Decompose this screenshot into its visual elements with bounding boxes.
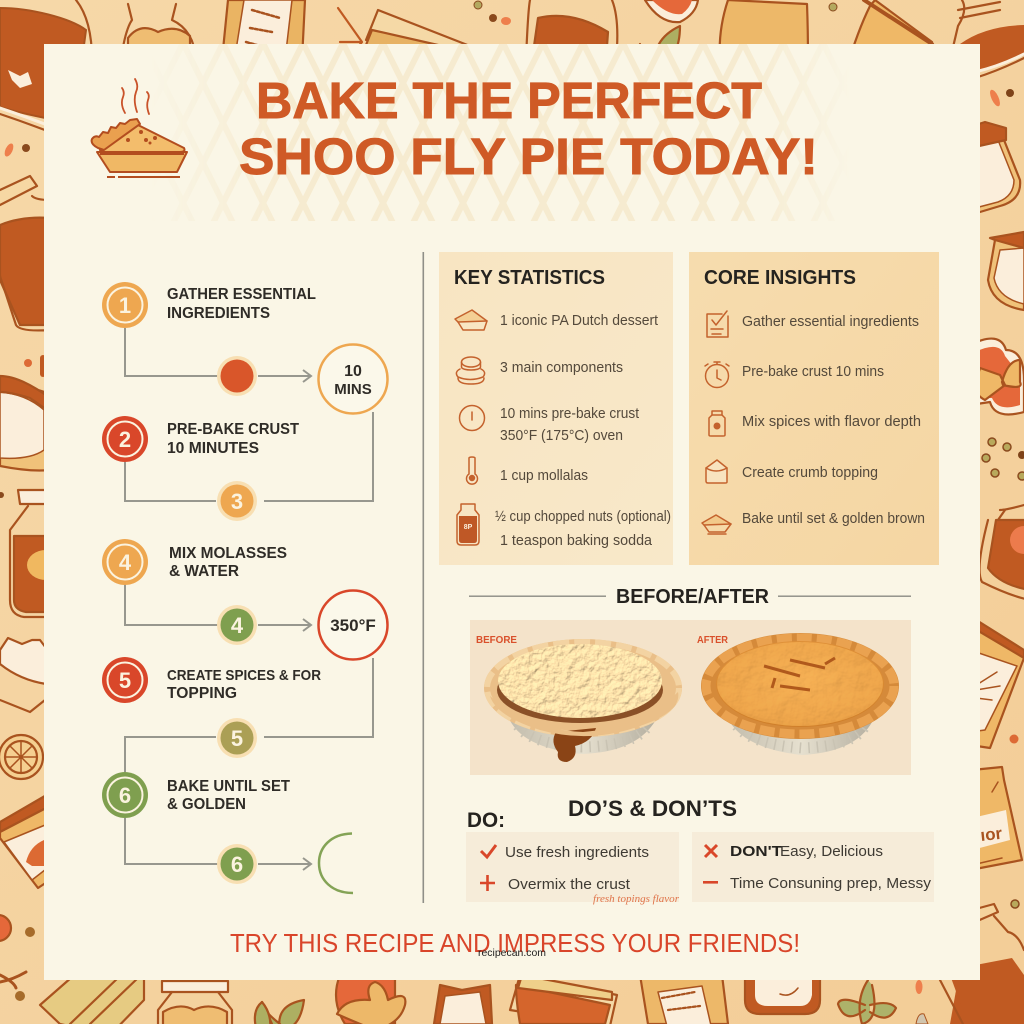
node 4 — [217, 605, 257, 645]
right column doodles — [950, 25, 1024, 1024]
step 5 badge — [102, 657, 148, 703]
step 6 label — [167, 778, 290, 813]
step 2 label: PRE-BAKE CRUST — [167, 421, 299, 438]
do item: Overmix the crust — [508, 876, 631, 893]
before pie: raw crumb topping — [484, 639, 682, 762]
stat text: pre-bake: 10 mins pre-bake crust — [500, 406, 639, 422]
step 2 label: 10 MINUTES — [167, 440, 259, 457]
callout: 350F: 350°F — [330, 616, 376, 635]
icon: molasses jar: 8P — [464, 524, 473, 531]
icon: clock — [460, 406, 484, 430]
step 6 badge — [102, 772, 148, 818]
step 2 badge — [102, 416, 148, 462]
panel: key statistics — [439, 252, 673, 565]
node 6 — [217, 844, 257, 884]
step 4 label: MIX MOLASSES — [169, 545, 287, 562]
insight text: bake: Bake until set & golden brown — [742, 511, 925, 527]
callout: 10 mins: MINS — [334, 381, 372, 398]
call to action: TRY THIS RECIPE AND IMPRESS YOUR FRIENDS! — [230, 928, 800, 958]
insight text: pre-bake: Pre-bake crust 10 mins — [742, 364, 884, 380]
flour bag label text: ıor — [979, 824, 1003, 845]
icon: cross — [705, 845, 717, 857]
heading: core insights: CORE INSIGHTS — [704, 267, 856, 289]
stat text: nuts and soda — [495, 509, 671, 549]
icon: molasses jar — [457, 504, 479, 545]
heading: key statistics: KEY STATISTICS — [454, 267, 605, 289]
stat text: nuts and soda: ½ cup chopped nuts (optional) — [495, 509, 671, 525]
stat text: nuts and soda: 1 teaspon baking sodda — [500, 533, 653, 549]
after label: AFTER — [697, 634, 728, 646]
icon: spice jar — [709, 411, 725, 436]
heading: before and after: BEFORE/AFTER — [616, 586, 770, 608]
stat text: molasses: 1 cup mollalas — [500, 468, 588, 484]
callout: 10 mins — [318, 344, 388, 414]
icon: check — [481, 845, 496, 857]
stat text: dessert: 1 iconic PA Dutch dessert — [500, 313, 658, 329]
step 2 badge: 2 — [119, 427, 131, 452]
insight text: ingredients: Gather essential ingredients — [742, 314, 919, 330]
don't item: Easy, Delicious — [780, 843, 883, 860]
photo comparison panel — [470, 620, 911, 775]
icon: steaming pie slice — [92, 79, 187, 177]
icon: plus — [480, 875, 495, 891]
top left rust jar — [0, 8, 86, 119]
do item: Use fresh ingredients — [505, 844, 649, 861]
top row doodles — [76, 0, 1000, 122]
bottom row doodles — [40, 970, 1024, 1024]
step 6 label: & GOLDEN — [167, 796, 246, 813]
node 3 — [217, 481, 257, 521]
panel: don't list — [692, 832, 934, 902]
node 5: 5 — [231, 726, 243, 751]
step 5 label: TOPPING — [167, 685, 237, 702]
step 1 badge: 1 — [119, 293, 131, 318]
node 6: 6 — [231, 852, 243, 877]
node: red dot — [217, 356, 257, 396]
script note: fresh topings flavor — [593, 894, 679, 905]
don't item: Time Consuning prep, Messy — [730, 875, 932, 892]
step 4 badge — [102, 539, 148, 585]
panel: do list — [466, 832, 679, 905]
step 2 label — [167, 421, 299, 457]
flowchart: six baking steps — [102, 282, 388, 893]
step 6 label: BAKE UNTIL SET — [167, 778, 290, 795]
icon: stopwatch — [705, 362, 729, 388]
left column doodles — [0, 70, 65, 988]
don't item — [730, 843, 883, 860]
watermark: recipecan.com — [478, 947, 546, 959]
step 1 label — [167, 286, 316, 322]
panel: core insights — [689, 252, 939, 565]
icon: baked pie — [702, 515, 731, 534]
don't item: DON'T — [730, 843, 782, 860]
heading: do's and don'ts: DO’S & DON’TS — [568, 796, 737, 821]
step 4 badge: 4 — [119, 550, 132, 575]
icon: pie — [455, 310, 487, 330]
title — [239, 72, 818, 185]
icon: checklist — [707, 311, 728, 337]
lattice header band — [200, 44, 812, 221]
open arc — [319, 834, 353, 893]
title: SHOO FLY PIE TODAY! — [239, 128, 818, 185]
step 5 label — [167, 667, 321, 702]
title: BAKE THE PERFECT — [256, 72, 762, 129]
icon: layers — [456, 357, 485, 384]
node 5 — [217, 718, 257, 758]
icon: thermometer — [466, 457, 478, 484]
stat text: components: 3 main components — [500, 360, 623, 376]
stat text: pre-bake: 350°F (175°C) oven — [500, 428, 623, 444]
step 1 label: GATHER ESSENTIAL — [167, 286, 316, 303]
insight text: spices: Mix spices with flavor depth — [742, 414, 921, 430]
step 4 label — [169, 545, 287, 580]
callout: 10 mins: 10 — [344, 363, 362, 380]
step 5 badge: 5 — [119, 668, 131, 693]
do label: DO: — [467, 809, 505, 832]
stat text: pre-bake — [500, 406, 639, 444]
callout: 350F — [318, 590, 388, 660]
node 3: 3 — [231, 489, 243, 514]
before label: BEFORE — [476, 634, 517, 646]
insight text: crumb: Create crumb topping — [742, 465, 878, 481]
node 4: 4 — [231, 613, 244, 638]
step 1 label: INGREDIENTS — [167, 305, 270, 322]
step 4 label: & WATER — [169, 563, 239, 580]
step 5 label: CREATE SPICES & FOR — [167, 667, 321, 684]
step 6 badge: 6 — [119, 783, 131, 808]
icon: minus — [703, 881, 718, 884]
after pie: golden baked crust — [701, 633, 899, 755]
icon: crumb box — [706, 460, 727, 483]
step 1 badge — [102, 282, 148, 328]
